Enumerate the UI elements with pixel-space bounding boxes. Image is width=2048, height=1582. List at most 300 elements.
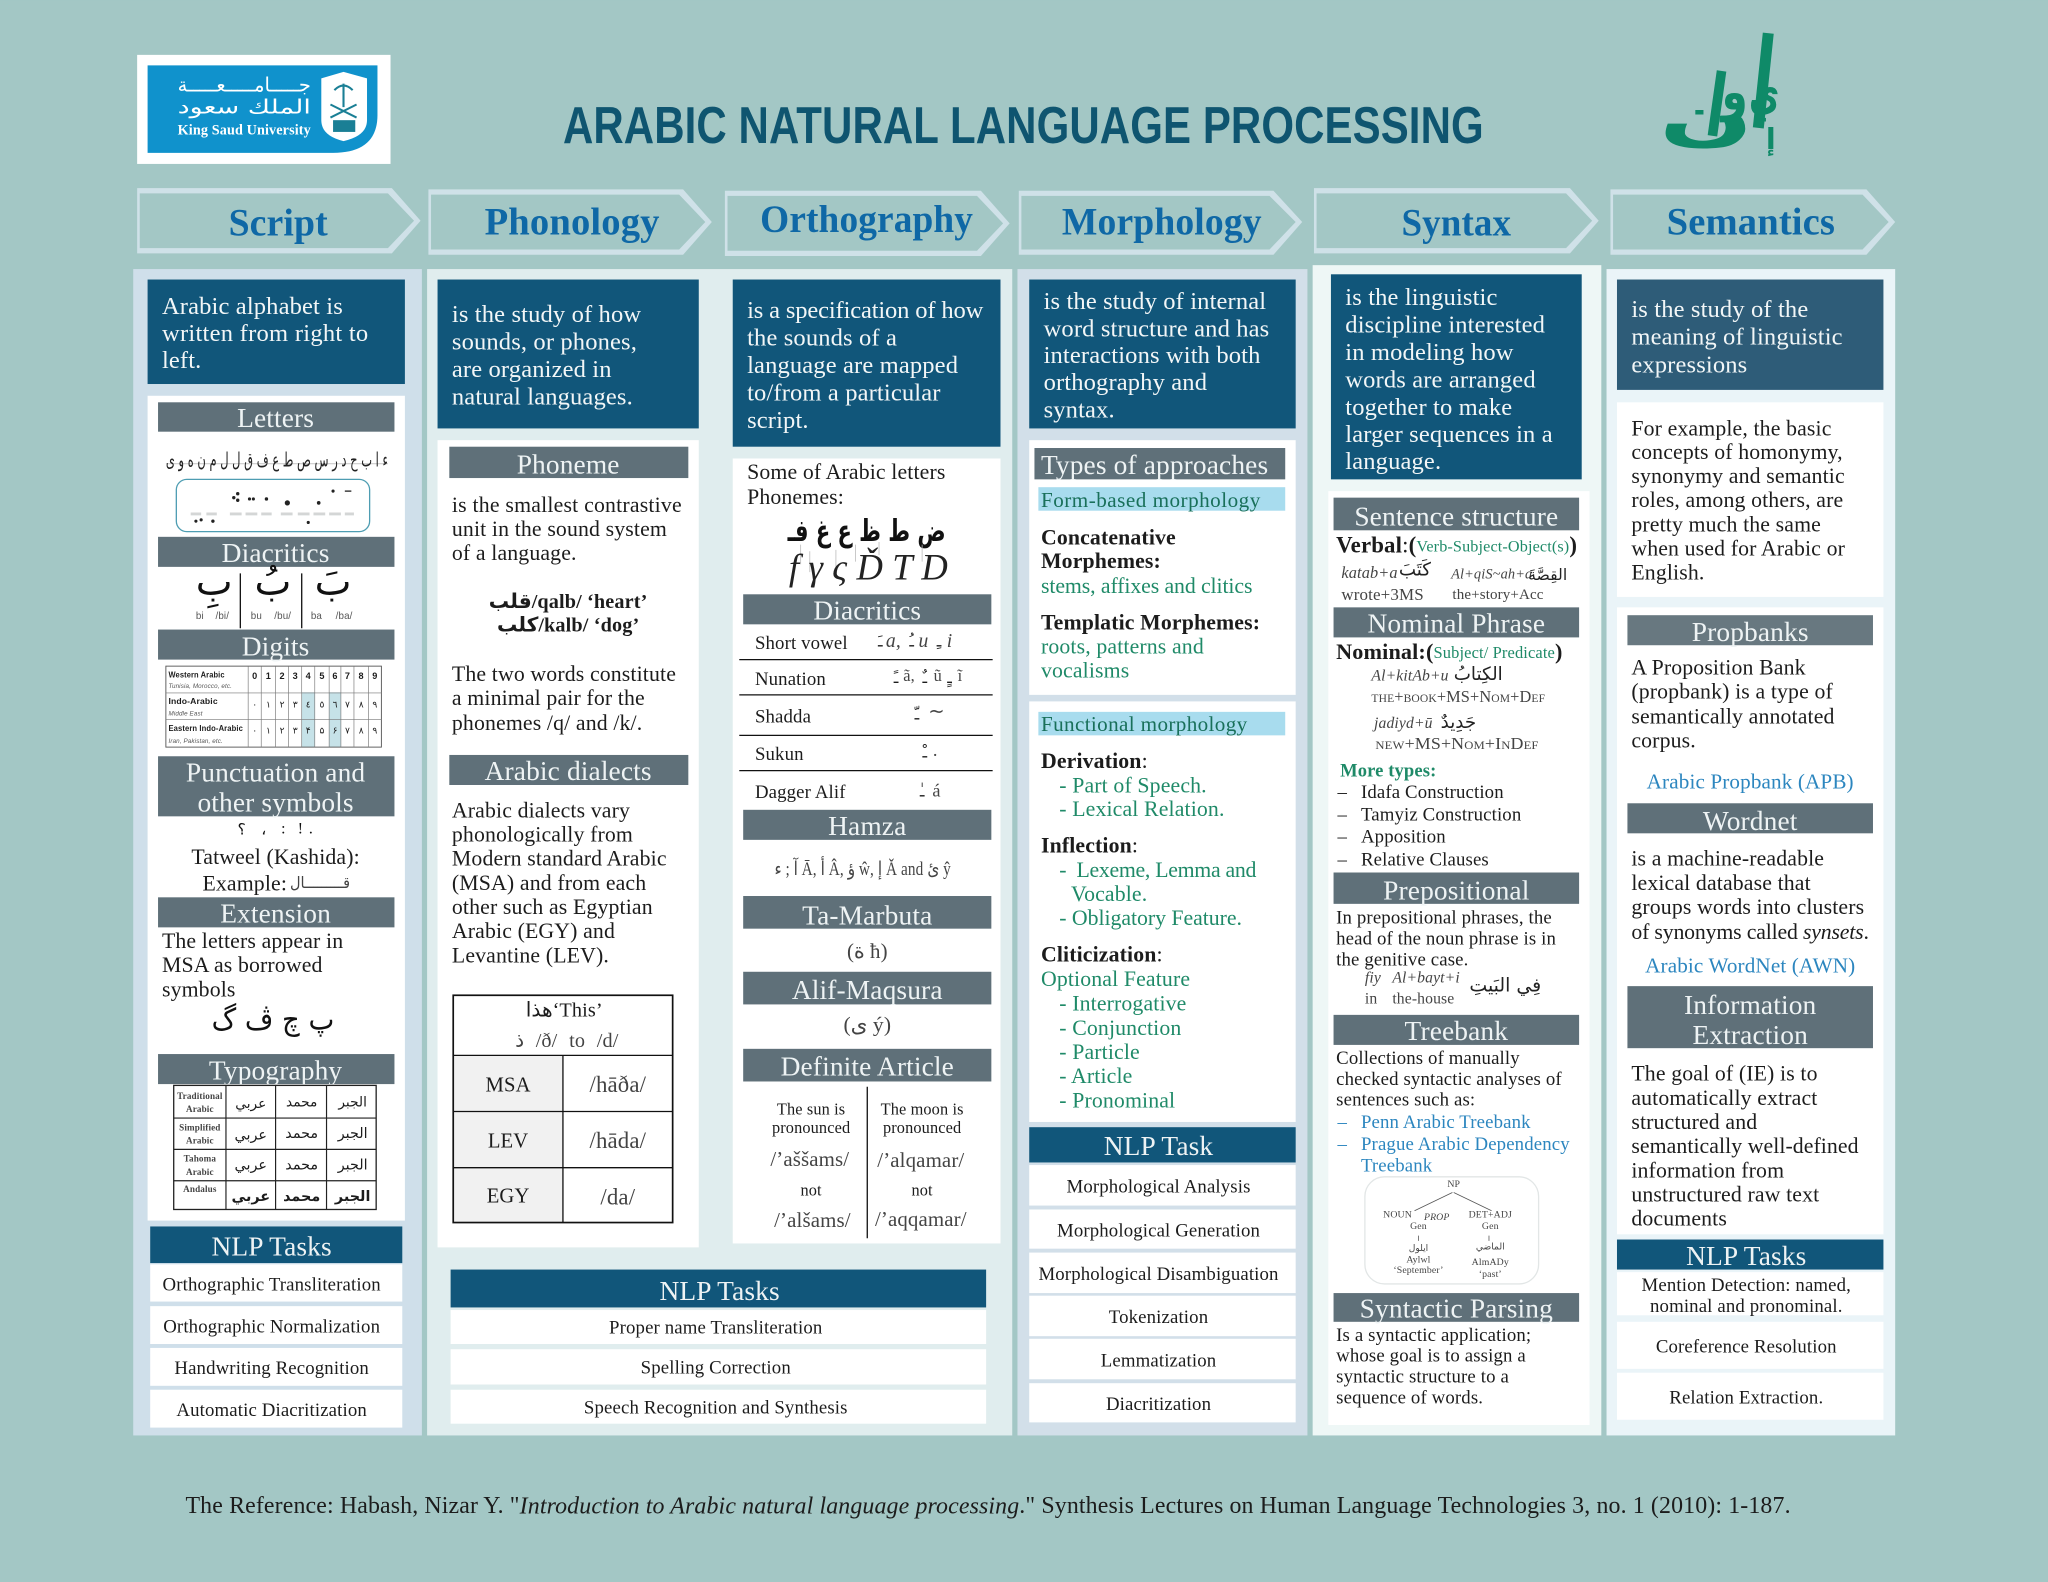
Hamza forms: ء‎ ; ‎آ‎ Ā, ‎أ‎ Â, ‎ؤ‎ ŵ, ‎إ‎ Ǎ and ‎ئ‎ ŷ [775, 856, 951, 881]
More types list: Apposition [1361, 827, 1446, 848]
Extension text: MSA as borrowed [162, 953, 323, 977]
title: ARABIC NATURAL LANGUAGE PROCESSING [563, 97, 1484, 155]
section: Typography: Typography [209, 1055, 342, 1085]
Extension text [162, 929, 343, 1001]
Prepositional text: the-house [1392, 990, 1454, 1007]
dialects text: Levantine (LEV). [452, 943, 609, 967]
NLP tasks: Semantics [1617, 1240, 1883, 1420]
More types list [1336, 760, 1522, 870]
Phonemes text [747, 460, 945, 509]
Phoneme definition: is the smallest contrastive [452, 493, 682, 517]
section: Prepositional [1334, 873, 1579, 906]
Information Extraction text: The goal of (IE) is to [1631, 1062, 1818, 1086]
section: Letters [158, 402, 394, 433]
NLP tasks: Script [150, 1226, 402, 1428]
diacritics rows: ـِ [936, 631, 942, 650]
definite article columns: pronounced [772, 1118, 850, 1137]
definite article columns [770, 1087, 967, 1238]
NLP tasks: Semantics: Mention Detection: named, [1642, 1275, 1851, 1296]
logo: Arabic calligraphy: إ [1766, 122, 1776, 157]
dialects text: Arabic (EGY) and [452, 919, 615, 943]
typography table: محمد [283, 1189, 320, 1205]
intro text: Phonology: natural languages. [452, 383, 633, 410]
Arabic letter phonemes figure: f γ ς Ď T D [789, 547, 948, 588]
syntax tree figure: ‘September’ [1393, 1265, 1444, 1276]
Inflection: Vocable. [1071, 882, 1147, 906]
Cliticization: - Particle [1059, 1040, 1140, 1064]
extension letters: پ چ ڤ گ [212, 1002, 334, 1038]
diacritics rows: a, [886, 631, 901, 652]
Syntactic Parsing text: syntactic structure to a [1336, 1367, 1509, 1388]
Inflection: - Obligatory Feature. [1059, 906, 1242, 930]
minimal pair explanation: The two words constitute [452, 662, 676, 686]
digits table: ٢ [280, 701, 285, 711]
Templatic Morphemes [1041, 610, 1260, 683]
digits table: Western Arabic [168, 669, 225, 679]
syntax tree figure: Aylwl [1406, 1255, 1431, 1266]
typography table: Arabic [186, 1135, 214, 1145]
NLP tasks: Phonology and Orthography: Proper name Transliteration [609, 1318, 823, 1339]
intro text: Semantics: is the study of the [1631, 296, 1808, 323]
intro text: Syntax: discipline interested [1345, 312, 1545, 339]
Treebank text: Collections of manually [1336, 1048, 1520, 1069]
Concatenative Morphemes: stems, affixes and clitics [1041, 574, 1253, 598]
definite article columns: /’alqamar/ [877, 1148, 964, 1172]
NLP tasks: Phonology and Orthography: NLP Tasks [660, 1276, 780, 1306]
Wordnet text: lexical database that [1631, 871, 1811, 895]
section: Extension: Extension [220, 899, 331, 929]
digits table: ۵ [320, 727, 325, 737]
Treebank text: sentences such as: [1336, 1090, 1475, 1111]
digits table [166, 666, 381, 747]
section: Ta-Marbuta [743, 896, 991, 931]
dialects text: phonologically from [452, 823, 633, 847]
More types list: More types: [1340, 760, 1436, 781]
diacritics rows: ـْ [921, 742, 927, 761]
section: Punctuation and other symbols: other symbols [197, 788, 354, 818]
intro text: Orthography: to/from a particular [747, 379, 941, 406]
definite article columns: not [800, 1181, 822, 1200]
Verbal structure: Al+qiS~ah+a [1450, 566, 1532, 582]
Wordnet text: of synonyms called synsets. [1631, 920, 1869, 944]
rounded box: diacritic marks [176, 479, 370, 532]
diacritics rows: i [947, 631, 952, 652]
typography table: محمد [286, 1095, 317, 1111]
diacritics rows: Shadda [755, 706, 812, 727]
Treebank text: Treebank [1361, 1156, 1433, 1177]
intro text: Semantics [1617, 280, 1883, 390]
Concatenative Morphemes: Morphemes: [1041, 549, 1161, 573]
diacritics examples: /bu/ [274, 611, 291, 622]
Information Extraction text: unstructured raw text [1631, 1182, 1819, 1206]
panel: Script [133, 269, 422, 1435]
Nominal structure: Nominal:(Subject/ Predicate) [1336, 639, 1563, 664]
typography table: Andalus [183, 1184, 217, 1194]
diacritics examples: ba [311, 611, 322, 622]
arrow header: Script: Script [229, 202, 328, 245]
Verbal structure: the+story+Acc [1452, 587, 1544, 603]
Derivation: - Lexical Relation. [1059, 797, 1225, 821]
dialects text: Arabic dialects vary [452, 798, 630, 822]
typography table: الجبر [334, 1189, 370, 1205]
intro text: Syntax: larger sequences in a [1345, 421, 1553, 448]
syntax tree figure: Gen [1410, 1221, 1427, 1232]
intro text: Syntax: in modeling how [1345, 339, 1514, 366]
Prepositional text: فِي البَيتِ [1469, 974, 1541, 996]
diacritics rows: ـٍ [946, 668, 953, 688]
logo: King Saud University: الملك سعود [178, 96, 311, 119]
section: Definite Article [743, 1049, 991, 1081]
Inflection: Inflection: [1041, 834, 1138, 858]
diacritics rows: ũ [934, 666, 942, 685]
Derivation: Derivation: [1041, 749, 1148, 773]
diacritics rows: Sukun [755, 744, 804, 765]
diacritics examples: /bi/ [216, 611, 229, 622]
arrow header: Morphology [1019, 191, 1302, 255]
intro text: Morphology: syntax. [1044, 396, 1115, 423]
dialects table: /hāða/ [589, 1072, 647, 1097]
section: Diacritics: Diacritics [813, 596, 921, 626]
digits table: Indo-Arabic [168, 696, 218, 706]
definite article columns: The moon is [881, 1100, 964, 1119]
NLP task: Morphology: NLP Task [1104, 1131, 1213, 1161]
Propbank text: A Proposition Bank [1631, 655, 1806, 679]
typography table: عربي [231, 1189, 270, 1205]
Verbal structure: wrote+3MS [1341, 585, 1424, 604]
section: Information Extraction: Extraction [1692, 1020, 1808, 1050]
diacritics rows: Nunation [755, 669, 826, 690]
section: Digits [158, 630, 394, 661]
Propbank text: (propbank) is a type of [1631, 680, 1833, 704]
Derivation: - Part of Speech. [1059, 774, 1207, 798]
Extension text: symbols [162, 977, 236, 1001]
Information Extraction text: structured and [1631, 1110, 1757, 1134]
logo: Arabic calligraphy: و [1720, 63, 1748, 123]
dialects table: LEV [488, 1130, 528, 1152]
dialects table: ذ /ð/ to /d/ [515, 1030, 619, 1052]
Information Extraction text: automatically extract [1631, 1086, 1817, 1110]
NLP task: Morphology: Morphological Analysis [1067, 1177, 1251, 1198]
Wordnet text: groups words into clusters [1631, 895, 1864, 919]
dialects text: other such as Egyptian [452, 895, 653, 919]
dialects text [452, 798, 667, 967]
intro text: Syntax: is the linguistic [1345, 284, 1498, 311]
intro text: Phonology: is the study of how [452, 301, 641, 328]
digits table: 2 [280, 671, 285, 681]
intro text: Syntax: together to make [1345, 394, 1512, 421]
intro text: Syntax: language. [1345, 448, 1441, 475]
dialects table [453, 995, 673, 1223]
Verbal structure: katab+a [1341, 563, 1398, 582]
dialects table: هذا‘This’ [526, 1000, 603, 1022]
Ta-Marbuta form: (ة ħ) [847, 939, 888, 963]
section: Punctuation and other symbols: Punctuation and [186, 758, 365, 788]
logo: Arabic calligraphy: ن [1659, 82, 1754, 154]
typography table: الجبر [337, 1126, 368, 1142]
digits table: Eastern Indo-Arabic [168, 723, 243, 733]
Alif-Maqsura form: (ى ý) [843, 1013, 891, 1037]
Phonemes text: Some of Arabic letters [747, 460, 945, 484]
example text block: when used for Arabic or [1631, 537, 1846, 561]
digits table: ٩ [372, 701, 377, 711]
typography table: محمد [285, 1126, 318, 1142]
Propbank text: corpus. [1631, 729, 1696, 753]
section: Nominal Phrase [1334, 607, 1579, 639]
section: Diacritics: Diacritics [222, 538, 330, 568]
Prepositional text: the genitive case. [1336, 949, 1468, 970]
syntax tree figure: AlmADy [1472, 1257, 1509, 1268]
typography table: Tahoma [184, 1154, 216, 1164]
diacritics rows: ـً [893, 668, 899, 687]
minimal pair explanation: phonemes /q/ and /k/. [452, 711, 642, 735]
syntax tree figure: PROP [1423, 1212, 1449, 1223]
example text block: concepts of homonymy, [1631, 440, 1843, 464]
Syntactic Parsing text: Is a syntactic application; [1336, 1325, 1531, 1346]
intro text: Orthography: language are mapped [747, 352, 958, 379]
NLP tasks: Script: Orthographic Normalization [163, 1316, 381, 1337]
logo: King Saud University: جـــــامـــــعـــــة [178, 73, 311, 96]
Concatenative Morphemes [1041, 525, 1253, 598]
digits table: Iran, Pakistan, etc. [168, 738, 223, 745]
diacritics examples: bi [196, 611, 204, 622]
Tatweel text: قـــــــــال [290, 873, 350, 892]
Derivation [1041, 749, 1225, 821]
intro text: Morphology: interactions with both [1044, 342, 1261, 369]
Prepositional text: Al+bayt+i [1391, 969, 1460, 986]
Cliticization: - Interrogative [1059, 992, 1186, 1016]
section: Diacritics [743, 594, 991, 626]
NLP task: Morphology [1029, 1127, 1296, 1422]
digits table: ۱ [266, 727, 271, 737]
dialects table: EGY [487, 1185, 529, 1207]
diacritics rows: á [932, 781, 941, 801]
Treebank text: – [1336, 1112, 1347, 1133]
minimal pair example: قلب/qalb/ ‘heart’ [489, 591, 648, 613]
syntax tree figure: Gen [1482, 1221, 1499, 1232]
panel: Morphology [1017, 269, 1307, 1435]
Cliticization [1041, 943, 1190, 1112]
punctuation marks: . [309, 821, 313, 838]
digits table: 3 [293, 671, 298, 681]
typography table [174, 1085, 376, 1209]
diacritics examples: bu [251, 611, 262, 622]
digits table: ۴ [306, 727, 311, 737]
reference footer: The Reference: Habash, Nizar Y. "Introduction to Arabic natural language processing." Synthesis Lectures on Human Language Technologies 3, no. 1 (2010): 1-187. [185, 1492, 1791, 1519]
Nominal structure: new+MS+Nom+InDef [1375, 734, 1539, 753]
diacritics rows: Dagger Alif [755, 782, 846, 803]
arrow header: Phonology: Phonology [485, 200, 660, 243]
syntax tree figure: ايلول [1409, 1244, 1428, 1254]
Treebank text [1336, 1048, 1570, 1177]
intro text: Semantics: expressions [1631, 351, 1747, 378]
Treebank text: – [1336, 1134, 1347, 1155]
NLP task: Morphology: Morphological Generation [1057, 1220, 1261, 1241]
Templatic Morphemes: roots, patterns and [1041, 635, 1204, 659]
Information Extraction text: documents [1631, 1207, 1727, 1231]
Concatenative Morphemes: Concatenative [1041, 525, 1176, 549]
logo: King Saud University [137, 55, 391, 164]
intro text: Phonology [438, 280, 699, 428]
Tatweel text: Tatweel (Kashida): [191, 845, 360, 869]
diacritics rows: ـَ [877, 631, 883, 650]
section: Wordnet [1627, 803, 1873, 836]
definite article columns: The sun is [777, 1100, 845, 1119]
section: Letters: Letters [237, 403, 314, 433]
digits table: ۸ [359, 727, 364, 737]
typography table: Simplified [179, 1122, 221, 1132]
section: Sentence structure: Sentence structure [1354, 502, 1558, 532]
logo: King Saud University: King Saud University [178, 122, 311, 138]
section: Propbanks: Propbanks [1692, 617, 1809, 647]
minimal pair explanation: a minimal pair for the [452, 686, 645, 710]
Nominal structure: الكِتابُ [1454, 664, 1503, 685]
band: Functional morphology: Functional morphology [1041, 712, 1248, 736]
digits table: 9 [372, 671, 377, 681]
digits table: ۰ [252, 727, 257, 737]
arrow header: Phonology [428, 189, 712, 255]
digits table: ۹ [372, 727, 377, 737]
column: Orthography [451, 280, 1000, 1424]
column: Phonology [438, 280, 699, 1247]
punctuation marks: ، [261, 819, 266, 838]
diacritics examples: /ba/ [336, 611, 353, 622]
section: Digits: Digits [242, 631, 309, 661]
section: Hamza: Hamza [828, 811, 906, 841]
digits table: 1 [266, 671, 271, 681]
NLP tasks: Semantics: Coreference Resolution [1656, 1337, 1837, 1358]
arrow header: Semantics: Semantics [1667, 200, 1835, 243]
Syntactic Parsing text: whose goal is to assign a [1336, 1346, 1526, 1367]
syntax tree figure: NP [1447, 1179, 1461, 1190]
Propbank text: semantically annotated [1631, 704, 1835, 728]
intro text: Syntax [1331, 274, 1582, 479]
Verbal structure [1336, 533, 1577, 604]
NLP tasks: Semantics: nominal and pronominal. [1650, 1296, 1843, 1317]
Nominal structure: Al+kitAb+u [1370, 668, 1449, 685]
logo: Arabic calligraphy: ا [1700, 57, 1733, 158]
section: Typography [158, 1054, 394, 1085]
definite article columns: /’alšams/ [774, 1208, 851, 1232]
intro text: Morphology [1029, 280, 1296, 428]
panel: Phonology and Orthography background [427, 269, 1012, 1435]
More types list: Relative Clauses [1361, 849, 1489, 870]
logo: Arabic calligraphy: ا [1744, 12, 1781, 159]
typography table: الجبر [337, 1157, 368, 1173]
section: Definite Article: Definite Article [781, 1051, 954, 1081]
section: Phoneme [449, 447, 688, 479]
digits table: 0 [252, 671, 257, 681]
Nominal structure [1336, 639, 1563, 753]
Nominal structure: جَدِيدٌ [1441, 712, 1476, 733]
Wordnet text: is a machine-readable [1631, 847, 1824, 871]
digits table: ۳ [293, 727, 298, 737]
section: Nominal Phrase: Nominal Phrase [1367, 609, 1545, 639]
example text block: For example, the basic [1631, 416, 1832, 440]
intro text: Morphology: word structure and has [1044, 315, 1269, 342]
Syntactic Parsing text [1336, 1325, 1531, 1408]
Phoneme definition [452, 493, 682, 565]
dialects table: /hāda/ [589, 1128, 647, 1153]
section: Information Extraction [1627, 986, 1873, 1050]
Propbank text [1631, 655, 1835, 753]
intro text: Orthography [733, 280, 1000, 447]
More types list: – [1336, 804, 1347, 825]
Phoneme definition: unit in the sound system [452, 517, 667, 541]
NLP tasks: Semantics: NLP Tasks [1686, 1241, 1806, 1271]
NLP task: Morphology: Lemmatization [1101, 1350, 1217, 1371]
Cliticization: - Article [1059, 1064, 1132, 1088]
digits table: ۶ [333, 727, 338, 737]
definite article columns: pronounced [883, 1118, 961, 1137]
section: Arabic dialects [449, 755, 688, 786]
syntax tree figure: الماضي [1476, 1243, 1505, 1253]
Inflection [1041, 834, 1256, 930]
arrow header: Syntax: Syntax [1401, 202, 1511, 245]
arrow header: Morphology: Morphology [1062, 200, 1262, 243]
diacritics rows: u [918, 631, 928, 652]
section: Phoneme: Phoneme [517, 449, 620, 479]
diacritics rows: ∼ [928, 701, 945, 722]
NLP tasks: Script: Automatic Diacritization [176, 1400, 367, 1421]
digits table: Middle East [168, 711, 203, 718]
typography table: الجبر [337, 1095, 367, 1111]
Treebank text: Prague Arabic Dependency [1361, 1134, 1570, 1155]
Nominal structure: the+book+MS+Nom+Def [1371, 687, 1545, 706]
example text block: pretty much the same [1631, 512, 1821, 536]
digits table: Tunisia, Morocco, etc. [168, 683, 232, 690]
More types list: Idafa Construction [1361, 782, 1504, 803]
section: Arabic dialects: Arabic dialects [485, 756, 652, 786]
dialects table: MSA [486, 1074, 531, 1096]
intro text: Orthography: script. [747, 407, 809, 434]
digits table: 4 [306, 671, 312, 681]
diacritics rows: ـّ [914, 705, 920, 724]
diacritics rows: ـٰ [919, 782, 925, 801]
intro text: Morphology: is the study of internal [1044, 288, 1266, 315]
typography table: Traditional [177, 1091, 223, 1101]
Arabic letter phonemes figure: ض ط ظ ع غ فـ [787, 514, 946, 549]
diacritics rows: ـٌ [921, 668, 928, 687]
definite article columns: /’aqqamar/ [875, 1207, 967, 1231]
arrow header: Syntax [1314, 188, 1599, 253]
diacritics rows: . [933, 740, 938, 760]
digits table: ٠ [252, 701, 257, 711]
Information Extraction text [1631, 1062, 1859, 1231]
diacritics examples: بُ [255, 560, 291, 605]
Inflection: - Lexeme, Lemma and [1059, 858, 1256, 882]
intro text: Script: written from right to [162, 320, 368, 347]
NLP task: Morphology: Diacritization [1106, 1394, 1212, 1415]
intro text: Syntax: words are arranged [1345, 366, 1536, 393]
arrow header: Semantics [1610, 189, 1895, 255]
Phoneme definition: of a language. [452, 541, 577, 565]
definite article columns: /’aššams/ [770, 1147, 849, 1171]
section: Hamza [743, 810, 991, 841]
intro text: Phonology: sounds, or phones, [452, 328, 637, 355]
Wordnet text [1631, 847, 1869, 944]
minimal pair example [489, 591, 648, 636]
intro text: Phonology: are organized in [452, 356, 612, 383]
panel: Syntax [1313, 265, 1601, 1435]
diacritics rows: ĩ [957, 666, 963, 685]
section: Information Extraction: Information [1684, 990, 1817, 1020]
diacritics examples [196, 560, 353, 628]
diacritics examples: بَ [315, 560, 352, 605]
typography table: محمد [285, 1157, 318, 1173]
punctuation marks: : [281, 821, 286, 838]
Cliticization: - Conjunction [1059, 1016, 1181, 1040]
digits table: ٣ [293, 701, 298, 711]
